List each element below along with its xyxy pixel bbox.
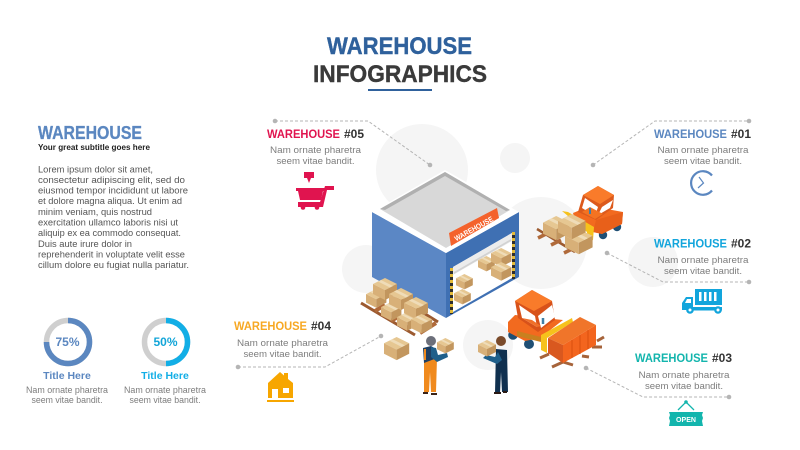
callout: warehouse 04 [234,319,331,402]
donut chart: 75% [26,320,108,405]
callout: warehouse 05: WAREHOUSE [267,127,340,141]
shoes [494,392,507,393]
donut chart: 50%: 50% [153,335,178,349]
donut chart: 75%: Title Here [43,370,91,382]
worker overall straps [424,349,426,360]
panel: intro text [38,123,189,270]
intro body: Lorem ipsum dolor sit amet, [38,164,153,174]
callout: warehouse 01: #01 [731,127,751,141]
icon: open sign: OPEN [676,415,696,424]
callout: warehouse 03: Nam ornate pharetra [638,370,730,380]
intro body: exercitation ullamco laboris nisi ut [38,218,179,228]
wheels [508,330,534,349]
head [496,336,506,346]
carried box [437,338,454,353]
callout: warehouse 04: Nam ornate pharetra [237,338,328,348]
callout: warehouse 05 [267,127,364,210]
loose box [384,337,409,360]
intro heading: WAREHOUSE [38,123,142,143]
worker torso [423,346,437,363]
callout: warehouse 02: Nam ornate pharetra [658,255,748,265]
warehouse building [372,170,519,318]
callout: warehouse 02: WAREHOUSE [654,236,727,250]
body [508,315,563,341]
pallet with boxes [361,278,438,335]
body [573,206,623,234]
title: INFOGRAPHICS [313,61,487,88]
wheels [599,223,621,239]
icon: clock [691,171,712,195]
donut chart: 75%: 75% [55,335,80,349]
worker head [426,336,436,346]
arm [483,352,502,364]
intro body: Duis aute irure dolor in [38,239,132,249]
icon: shopping cart [296,172,334,210]
title: WAREHOUSE [327,33,472,60]
orange crate [548,317,596,363]
intro body: reprehenderit in voluptate velit esse [38,249,185,259]
cab [578,186,614,220]
worker shoes [423,393,437,394]
loading door [452,232,514,314]
icon: house [267,372,294,402]
intro body [38,164,189,270]
worker in navy [478,336,508,393]
intro body: cillum dolore eu fugiat nulla pariatur. [38,260,189,270]
callout: warehouse 02: seem vitae bandit. [664,266,742,276]
donut chart: 50% [124,320,206,405]
forklift with crate [508,290,604,367]
callout: warehouse 05: seem vitae bandit. [276,156,354,166]
donut chart: 50%: Nam ornate pharetra [124,385,206,395]
donut chart: 50%: Title Here [141,370,189,382]
callout: warehouse 01: Nam ornate pharetra [658,145,748,155]
callout: warehouse 04: WAREHOUSE [234,319,307,333]
callout: warehouse 04: #04 [311,319,331,333]
warehouse sign: WAREHOUSE [453,214,495,243]
cab [515,290,555,332]
callout: warehouse 03: WAREHOUSE [635,351,708,365]
callout: warehouse 01 [654,127,751,195]
callout: warehouse 02 [654,236,751,314]
intro body: minim veniam, quis nostrud [38,207,152,217]
carried box [478,340,496,356]
callout: warehouse 05: #05 [344,127,364,141]
mast [562,211,594,243]
title [313,33,487,91]
callout: warehouse 05: Nam ornate pharetra [270,145,361,155]
connector lines [236,119,751,399]
background circles [342,124,678,370]
intro body: aliquip ex ea commodo consequat. [38,228,181,238]
intro body: consectetur adipiscing elit, sed do [38,175,185,185]
callout: warehouse 01: WAREHOUSE [654,127,727,141]
donut chart: 50%: seem vitae bandit. [130,395,200,405]
callout: warehouse 02: #02 [731,236,751,250]
mast [541,318,573,353]
donut chart: 75%: Nam ornate pharetra [26,385,108,395]
donut chart: 75%: seem vitae bandit. [32,395,102,405]
pallet [537,229,575,252]
intro body: eiusmod tempor incididunt ut labore [38,186,188,196]
worker arm [431,347,448,362]
right wall [446,212,519,318]
callout: warehouse 03 [635,351,732,426]
worker holding box [423,336,454,394]
callout: warehouse 03: seem vitae bandit. [645,381,723,391]
boxes [543,216,569,240]
roof [372,170,519,253]
worker legs [424,358,437,392]
intro body: et dolore magna aliqua. Ut enim ad [38,196,182,206]
callout: warehouse 01: seem vitae bandit. [664,156,742,166]
pallet slats [540,337,604,367]
left wall [372,212,446,318]
navy body [495,349,508,393]
callout: warehouse 03: #03 [712,351,732,365]
forklift with boxes [537,186,623,254]
icon: truck [682,289,722,314]
callout: warehouse 04: seem vitae bandit. [244,349,322,359]
intro subtitle: Your great subtitle goes here [38,142,150,152]
